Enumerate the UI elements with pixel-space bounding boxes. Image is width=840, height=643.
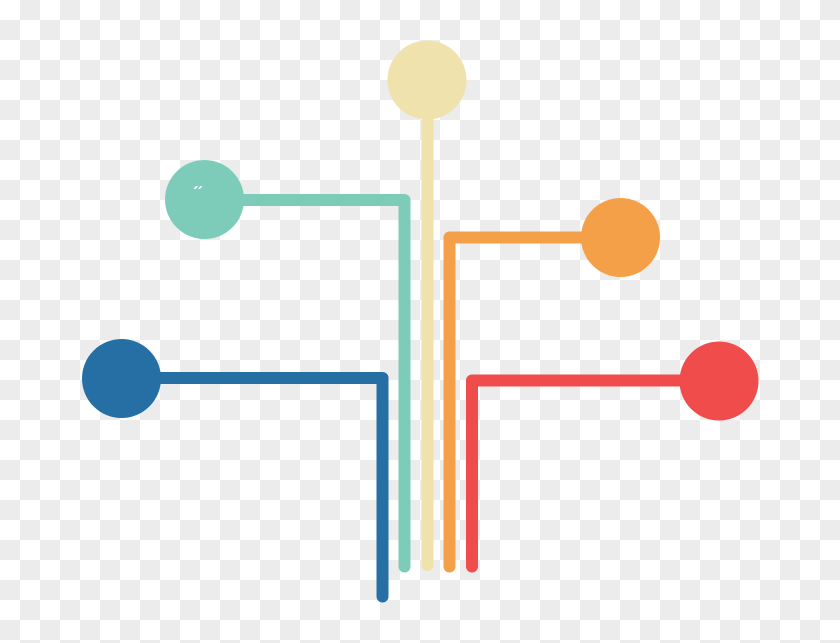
node: cream circle <box>388 40 466 120</box>
branch: orange <box>450 198 660 566</box>
branch: teal <box>165 160 404 566</box>
node: teal circle <box>165 160 244 239</box>
node: dark blue circle <box>82 339 161 418</box>
branch: red <box>472 342 758 566</box>
node: orange circle <box>581 198 660 277</box>
branch: dark blue <box>82 339 382 596</box>
icon: small white mark <box>194 186 202 189</box>
node: red circle <box>680 342 758 420</box>
branch: cream <box>388 40 466 565</box>
